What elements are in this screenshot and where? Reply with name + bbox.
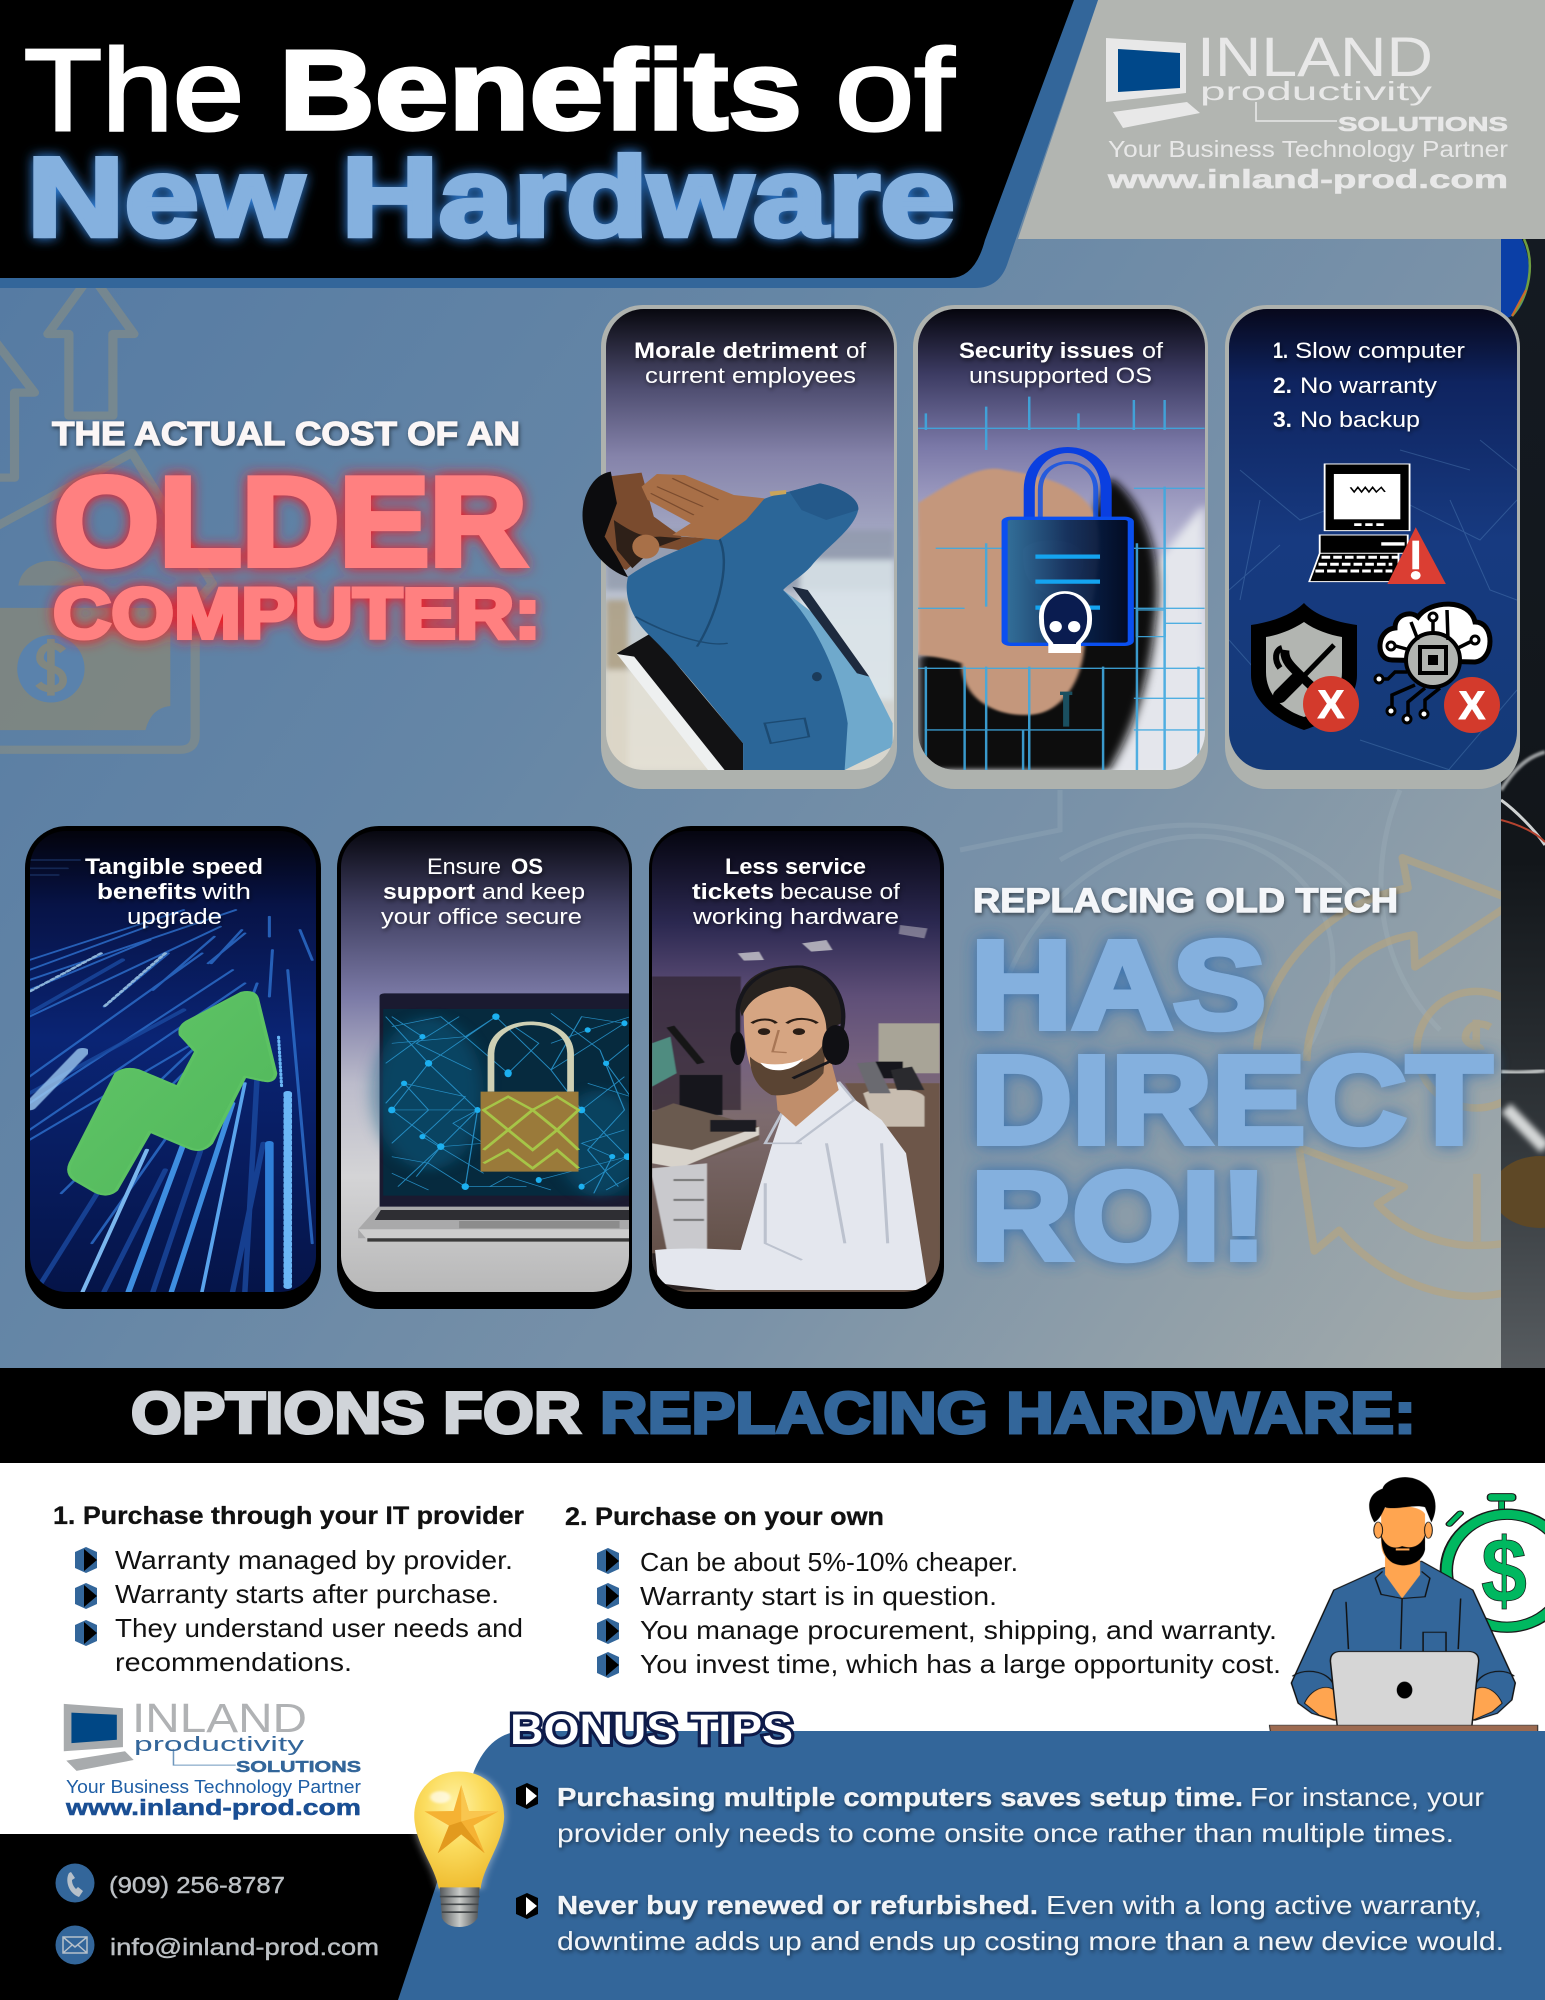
logo: Inland Productivity lower left: SOLUTIONS: [236, 1759, 361, 1776]
logo: Inland Productivity top right: INLAND: [1197, 25, 1433, 88]
option one: purchase through IT provider: 1. Purchase through your IT provider: [53, 1502, 524, 1530]
caption: and keep: [482, 879, 585, 904]
tip one: [557, 1782, 1484, 1848]
panel: bonus tips: [398, 1706, 1545, 2000]
icon: red X badge right: [1444, 677, 1500, 733]
logo: Inland Productivity top right: [1106, 25, 1508, 194]
caption: benefits: [97, 879, 197, 904]
list: 3.: [1273, 407, 1292, 432]
title line one: The: [24, 25, 244, 155]
option two: purchase on your own: Can be about 5%-10% cheaper.: [640, 1547, 1018, 1577]
tip two: Even with a long active warranty,: [1046, 1890, 1482, 1920]
panel: slow computer, no warranty, no backup: [1225, 305, 1520, 789]
banner: options for replacing hardware: REPLACING HARDWARE:: [600, 1381, 1416, 1446]
figure: man in blue shirt: [1269, 1477, 1538, 1732]
option one: purchase through IT provider: recommendations.: [115, 1647, 352, 1677]
option one: purchase through IT provider: They understand user needs and: [115, 1613, 523, 1643]
option one: purchase through IT provider: [53, 1502, 524, 1677]
icon: old computer with warning: [1309, 464, 1446, 584]
caption: because of: [780, 879, 901, 904]
option two: purchase on your own: 2. Purchase on your own: [565, 1503, 884, 1531]
caption: upgrade: [127, 904, 222, 929]
logo: Inland Productivity lower left: productivity: [134, 1734, 304, 1756]
option two: purchase on your own: You manage procurement, shipping, and warranty.: [640, 1615, 1277, 1645]
photo: laptop with padlock on screen: [358, 993, 643, 1242]
icon: light bulb with gold star: [413, 1771, 505, 1927]
photo: stressed man covering his face: [583, 472, 893, 770]
caption: tickets: [692, 879, 774, 904]
heading: the actual cost of an older computer: OLDER: [54, 451, 527, 592]
email address: info@inland-prod.com: [110, 1934, 379, 1960]
caption: [85, 854, 263, 929]
caption: Less service: [725, 854, 866, 879]
panel: security issues: [913, 305, 1208, 789]
caption: working hardware: [692, 904, 899, 929]
heading: replacing old tech has direct ROI: HAS: [971, 916, 1266, 1055]
caption: [959, 338, 1164, 388]
tip two: [557, 1890, 1504, 1956]
caption: unsupported OS: [969, 363, 1152, 388]
list: Slow computer: [1295, 338, 1466, 363]
heading: replacing old tech has direct ROI: DIRECT: [971, 1031, 1492, 1170]
icon: red X badge left: [1303, 676, 1359, 732]
caption: Tangible speed: [85, 854, 263, 879]
icon: red X badge left: X: [1318, 683, 1345, 727]
logo: Inland Productivity lower left: [64, 1695, 361, 1820]
heading: the actual cost of an older computer: THE ACTUAL COST OF AN: [52, 415, 520, 452]
logo: Inland Productivity top right: SOLUTIONS: [1338, 114, 1508, 136]
caption: of: [846, 338, 867, 363]
heading: replacing old tech has direct ROI: [971, 882, 1492, 1286]
illustration: man at laptop with dollar stopwatch: [1269, 1477, 1545, 1732]
panel: morale detriment: [583, 305, 897, 789]
option one: purchase through IT provider: Warranty managed by provider.: [115, 1545, 513, 1575]
logo: Inland Productivity lower left: Your Business Technology Partner: [66, 1777, 361, 1797]
panel: ensure OS support: [337, 826, 643, 1309]
list: [1273, 338, 1466, 432]
caption: your office secure: [381, 904, 582, 929]
photo: smiling support agent with headset in office: [652, 925, 940, 1290]
phone number: (909) 256-8787: [109, 1872, 285, 1898]
illustration: speed lines and green arrow: [29, 860, 312, 1292]
heading: replacing old tech has direct ROI: ROI!: [971, 1147, 1267, 1286]
option one: purchase through IT provider: Warranty starts after purchase.: [115, 1579, 499, 1609]
panel: less service tickets: [649, 826, 944, 1309]
list: 2.: [1273, 373, 1292, 398]
list: 1.: [1273, 338, 1288, 363]
bonus tips heading: BONUS TIPS: [510, 1706, 793, 1754]
heading: the actual cost of an older computer: [52, 415, 541, 654]
title line one: [24, 25, 955, 155]
heading: replacing old tech has direct ROI: REPLACING OLD TECH: [973, 882, 1398, 920]
caption: Morale detriment: [634, 338, 839, 363]
banner: options for replacing hardware: [0, 1368, 1545, 1463]
tip one: For instance, your: [1250, 1782, 1484, 1812]
white lower section: [0, 1463, 1545, 2000]
caption: support: [383, 879, 476, 904]
logo: Inland Productivity lower left: INLAND: [132, 1695, 307, 1741]
option two: purchase on your own: Warranty start is in question.: [640, 1581, 997, 1611]
background panel: [0, 0, 1545, 1368]
title line two: New Hardware: [27, 134, 955, 260]
contact panel: [0, 1834, 480, 2000]
caption: OS: [511, 854, 543, 879]
caption: current employees: [645, 363, 856, 388]
caption: of: [1142, 338, 1164, 363]
option two: purchase on your own: You invest time, which has a large opportunity cost.: [640, 1649, 1281, 1679]
logo: Inland Productivity top right: www.inland-prod.com: [1107, 164, 1508, 194]
icon: cloud circuit, no backup: [1375, 604, 1490, 723]
list: No backup: [1300, 407, 1420, 432]
decorative icons: rising arrows and wallet: [0, 274, 212, 750]
caption: with: [201, 879, 251, 904]
icon: dollar stopwatch: $: [1481, 1520, 1527, 1622]
logo: Inland Productivity top right: Your Business Technology Partner: [1108, 136, 1508, 162]
header: title banner: [0, 0, 1545, 288]
icon: email: [56, 1926, 94, 1964]
icon: phone: [56, 1864, 94, 1902]
tip two: Never buy renewed or refurbished.: [557, 1890, 1038, 1920]
icon: shield with tools, no warranty: [1251, 603, 1357, 730]
decorative icon: ROI arrows and coin: [1257, 858, 1545, 1296]
caption: [634, 338, 867, 388]
right edge photo strip: [1501, 239, 1545, 1368]
tip one: Purchasing multiple computers saves setup time.: [557, 1782, 1243, 1812]
caption: Security issues: [959, 338, 1134, 363]
logo: Inland Productivity lower left: www.inland-prod.com: [65, 1795, 361, 1820]
tip two: downtime adds up and ends up costing more than a new device would.: [557, 1926, 1504, 1956]
logo: Inland Productivity top right: productivity: [1200, 76, 1432, 106]
heading: the actual cost of an older computer: COMPUTER:: [53, 575, 541, 654]
tip one: provider only needs to come onsite once rather than multiple times.: [557, 1818, 1454, 1848]
panel: tangible speed benefits: [25, 826, 321, 1309]
photo: finger pressing a padlock with skull: [918, 397, 1205, 770]
option two: purchase on your own: [565, 1503, 1281, 1679]
title line one: of: [835, 25, 955, 155]
icon: red X badge right: X: [1459, 684, 1486, 728]
list: No warranty: [1300, 373, 1438, 398]
caption: [381, 854, 585, 929]
title line one: Benefits: [279, 27, 802, 153]
caption: Ensure: [427, 854, 501, 879]
caption: [692, 854, 901, 929]
icon: dollar stopwatch: [1441, 1494, 1545, 1632]
banner: options for replacing hardware: OPTIONS FOR: [131, 1381, 581, 1446]
